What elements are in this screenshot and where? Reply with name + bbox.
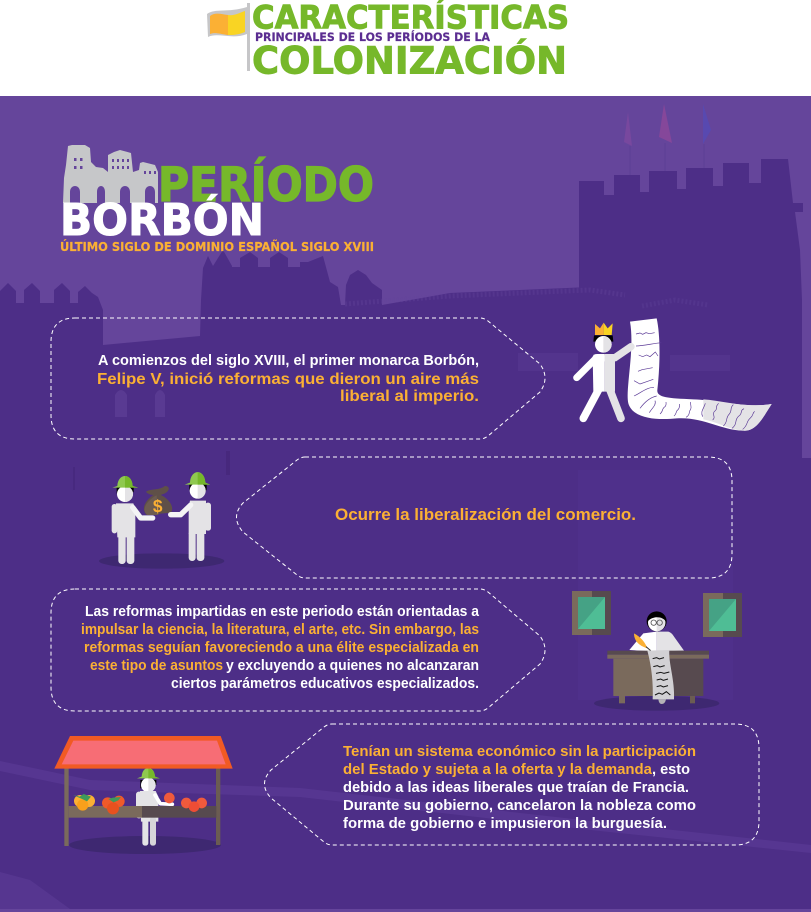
text: Felipe V: Felipe V, inició reformas que dieron un aire más bbox=[97, 371, 479, 388]
text: economic system: Tenían un sistema económico sin la participación bbox=[343, 744, 696, 760]
text: reforms bbox=[81, 604, 480, 692]
text: liberalization: Ocurre la liberalización del comercio. bbox=[335, 506, 636, 524]
text: economic system: del Estado y sujeta a la oferta y la demanda bbox=[343, 762, 653, 778]
text: economic system: Durante su gobierno, cancelaron la nobleza como bbox=[343, 798, 696, 814]
icon: fruit market stall bbox=[54, 736, 233, 854]
icon: king with scroll bbox=[577, 318, 772, 431]
text: Felipe V: liberal al imperio. bbox=[340, 388, 479, 405]
icon: scholar at desk bbox=[572, 591, 742, 711]
text: reforms: y excluyendo a quienes no alcanzaran bbox=[226, 658, 479, 674]
text: economic system: debido a las ideas liberales que traían de Francia. bbox=[343, 780, 689, 796]
text: reforms: impulsar la ciencia, la literatura, el arte, etc. Sin embargo, las bbox=[81, 622, 479, 638]
heading: BORBÓN: BORBÓN bbox=[60, 193, 264, 246]
text: reforms: reformas seguían favoreciendo a una élite especializada en bbox=[84, 640, 479, 656]
text: Felipe V bbox=[97, 353, 479, 405]
panel: callout 1 bbox=[51, 318, 545, 439]
heading: PERÍODO: PERÍODO bbox=[158, 158, 374, 213]
subheading: ÚLTIMO SIGLO DE DOMINIO ESPAÑOL SIGLO XVIII bbox=[60, 239, 374, 254]
title line 3: COLONIZACIÓN bbox=[252, 38, 567, 82]
panel: callout 4 bbox=[264, 724, 759, 845]
panel: callout 3 bbox=[51, 589, 545, 711]
window right bbox=[703, 593, 742, 637]
icon: two men with money bag bbox=[99, 472, 224, 569]
text: economic system bbox=[343, 744, 696, 832]
header logo bbox=[207, 0, 569, 82]
fruit bbox=[73, 793, 207, 814]
text: Felipe V: A comienzos del siglo XVIII, el primer monarca Borbón, bbox=[98, 353, 479, 369]
man right bbox=[171, 472, 211, 561]
text: economic system: , esto bbox=[652, 762, 690, 778]
vendor bbox=[136, 768, 172, 846]
window left bbox=[572, 591, 611, 635]
section heading bbox=[60, 145, 374, 254]
text: reforms: este tipo de asuntos bbox=[90, 658, 223, 674]
icon: castle ruins bbox=[63, 145, 158, 203]
text: reforms: Las reformas impartidas en este periodo están orientadas a bbox=[85, 604, 480, 620]
text: reforms: ciertos parámetros educativos especializados. bbox=[171, 676, 479, 692]
panel: callout 2 bbox=[236, 457, 732, 578]
king figure bbox=[577, 323, 631, 418]
flags on tower bbox=[624, 104, 711, 175]
title line 2: PRINCIPALES DE LOS PERÍODOS DE LA bbox=[255, 29, 490, 44]
man left bbox=[112, 476, 153, 564]
text: economic system: forma de gobierno e impusieron la burguesía. bbox=[343, 816, 667, 832]
money bag: $ bbox=[153, 496, 163, 516]
icon: yellow flag bbox=[207, 3, 250, 71]
